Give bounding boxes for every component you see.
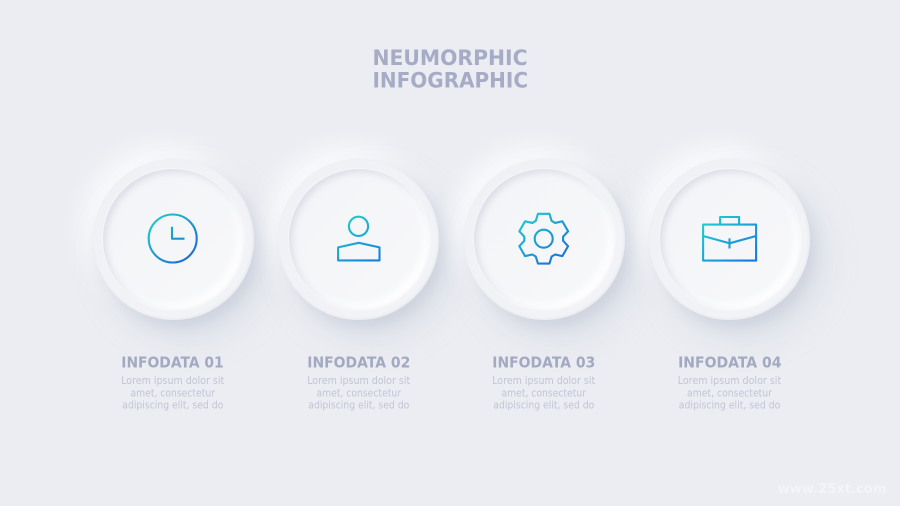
panel: infodata 01 bbox=[87, 150, 267, 412]
circle button 02 bbox=[278, 158, 439, 320]
panel 02 icon and text bbox=[307, 216, 410, 412]
title: INFOGRAPHIC bbox=[372, 68, 528, 92]
circle button 01 bbox=[92, 158, 254, 320]
text block 03: Lorem ipsum dolor sit bbox=[492, 376, 595, 387]
title bbox=[372, 46, 528, 92]
text block 01: amet, consectetur bbox=[130, 389, 216, 400]
text block 01: Lorem ipsum dolor sit bbox=[121, 376, 224, 387]
text block 02: adipiscing elit, sed do bbox=[308, 401, 409, 412]
watermark: www.25xt.com bbox=[778, 482, 886, 497]
text block 03 bbox=[492, 376, 595, 412]
icon: clock bbox=[149, 214, 197, 262]
text block 02 bbox=[307, 376, 410, 412]
heading: infodata 04: INFODATA 04 bbox=[678, 354, 781, 372]
text block 04 bbox=[677, 376, 781, 412]
text block 02: Lorem ipsum dolor sit bbox=[307, 376, 410, 387]
panel 03 icon and text bbox=[492, 212, 595, 412]
panel: infodata 04 bbox=[635, 150, 825, 412]
heading: infodata 02: INFODATA 02 bbox=[307, 354, 410, 372]
title: NEUMORPHIC bbox=[372, 46, 528, 70]
icon: gear bbox=[519, 214, 568, 264]
panel: infodata 02 bbox=[264, 150, 452, 412]
text block 01 bbox=[121, 376, 224, 412]
heading: infodata 01: INFODATA 01 bbox=[121, 354, 224, 372]
circle button 03 bbox=[464, 158, 624, 320]
text block 03: adipiscing elit, sed do bbox=[493, 401, 594, 412]
panel: infodata 03 bbox=[451, 150, 638, 412]
circle button 04 bbox=[649, 158, 810, 320]
icon: person bbox=[338, 217, 379, 260]
text block 04: amet, consectetur bbox=[686, 389, 772, 400]
panel 01 icon and text bbox=[121, 214, 224, 412]
panel 04 icon and text bbox=[677, 216, 781, 412]
text block 01: adipiscing elit, sed do bbox=[122, 401, 223, 412]
text block 04: Lorem ipsum dolor sit bbox=[677, 376, 781, 387]
icon: briefcase bbox=[703, 217, 756, 261]
text block 03: amet, consectetur bbox=[502, 389, 587, 400]
text block 02: amet, consectetur bbox=[316, 389, 401, 400]
text block 04: adipiscing elit, sed do bbox=[678, 401, 780, 412]
heading: infodata 03: INFODATA 03 bbox=[492, 354, 595, 372]
